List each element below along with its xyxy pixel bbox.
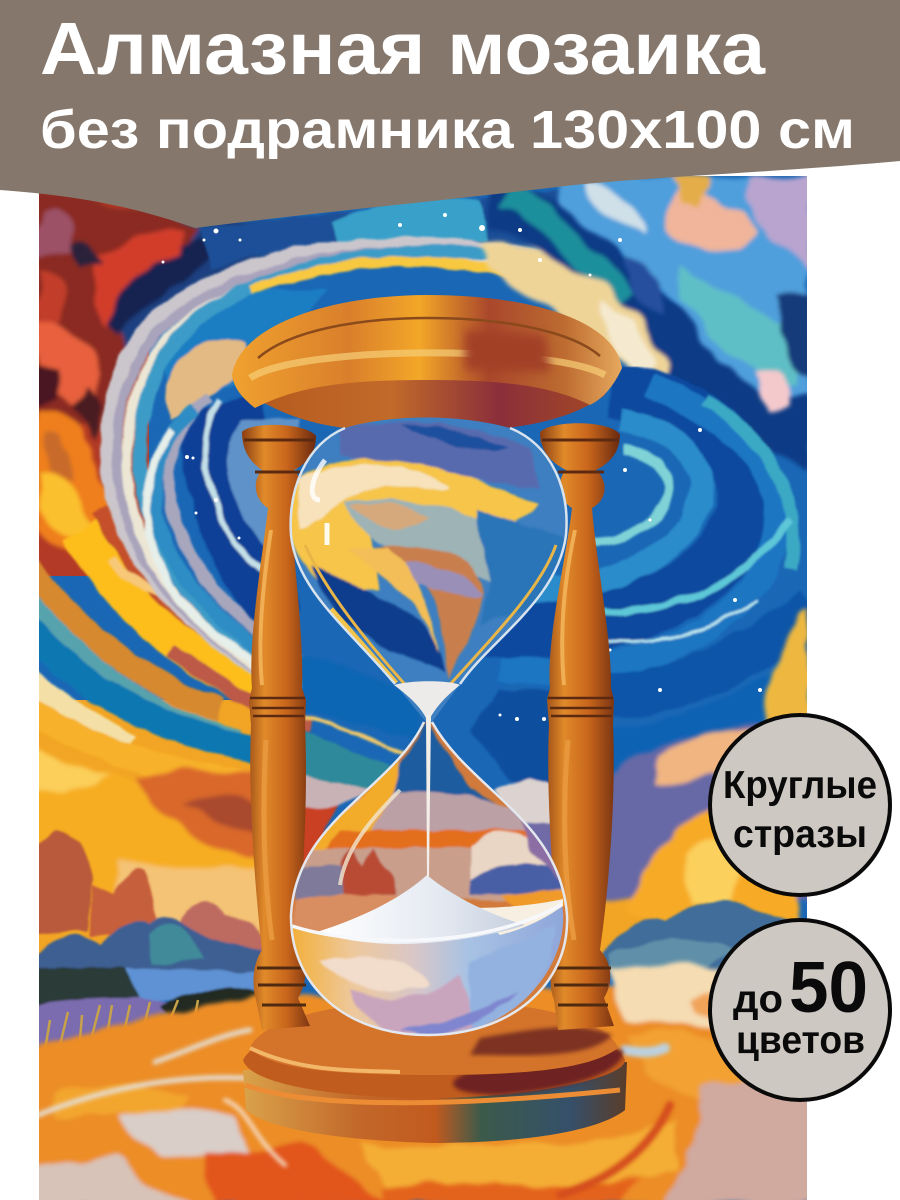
badge: round rhinestones (710, 715, 890, 895)
sky base (39, 176, 807, 1200)
badge: up to 50 colours: цветов (736, 1019, 865, 1062)
neck funnel (394, 681, 460, 722)
glass top bulb (292, 418, 566, 722)
hourglass (232, 295, 627, 1143)
mountains right (602, 898, 790, 972)
yellow and purple clouds lower right (606, 606, 807, 922)
badge: up to 50 colours: 50 (789, 948, 868, 1028)
right blue swirl (450, 385, 815, 752)
grass (45, 1000, 198, 1050)
mountains left (30, 830, 270, 1050)
top cap (232, 295, 622, 432)
sky stripes between columns and sunset behind bulb (302, 656, 552, 864)
red nebula clouds top left (39, 194, 281, 552)
left column (242, 425, 316, 1030)
stars (162, 213, 762, 721)
badge: up to 50 colours: до (733, 978, 783, 1021)
clouds top right (560, 176, 812, 415)
title: Алмазная мозаика (40, 7, 766, 90)
banner: title background (0, 0, 900, 228)
yellow sky and sunset clouds left (39, 747, 260, 934)
glass bottom bulb (285, 715, 575, 1040)
badge: round rhinestones: стразы (733, 813, 867, 856)
falling sand stream and glass outline (291, 428, 567, 1035)
painting: hourglass in swirling sky (20, 176, 815, 1200)
blue field above swirl and inner dark swirl (160, 190, 560, 640)
right column (540, 423, 620, 1030)
badge: round rhinestones: Круглые (723, 764, 877, 807)
ground (30, 962, 812, 1200)
badge: up to 50 colours (710, 920, 890, 1100)
left lower streaks (20, 510, 310, 790)
subtitle: без подрамника 130х100 см (40, 100, 855, 160)
wooden base (243, 1000, 627, 1143)
cloud behind cap right and deep blue wave (480, 188, 810, 470)
swirl bands (107, 243, 593, 702)
